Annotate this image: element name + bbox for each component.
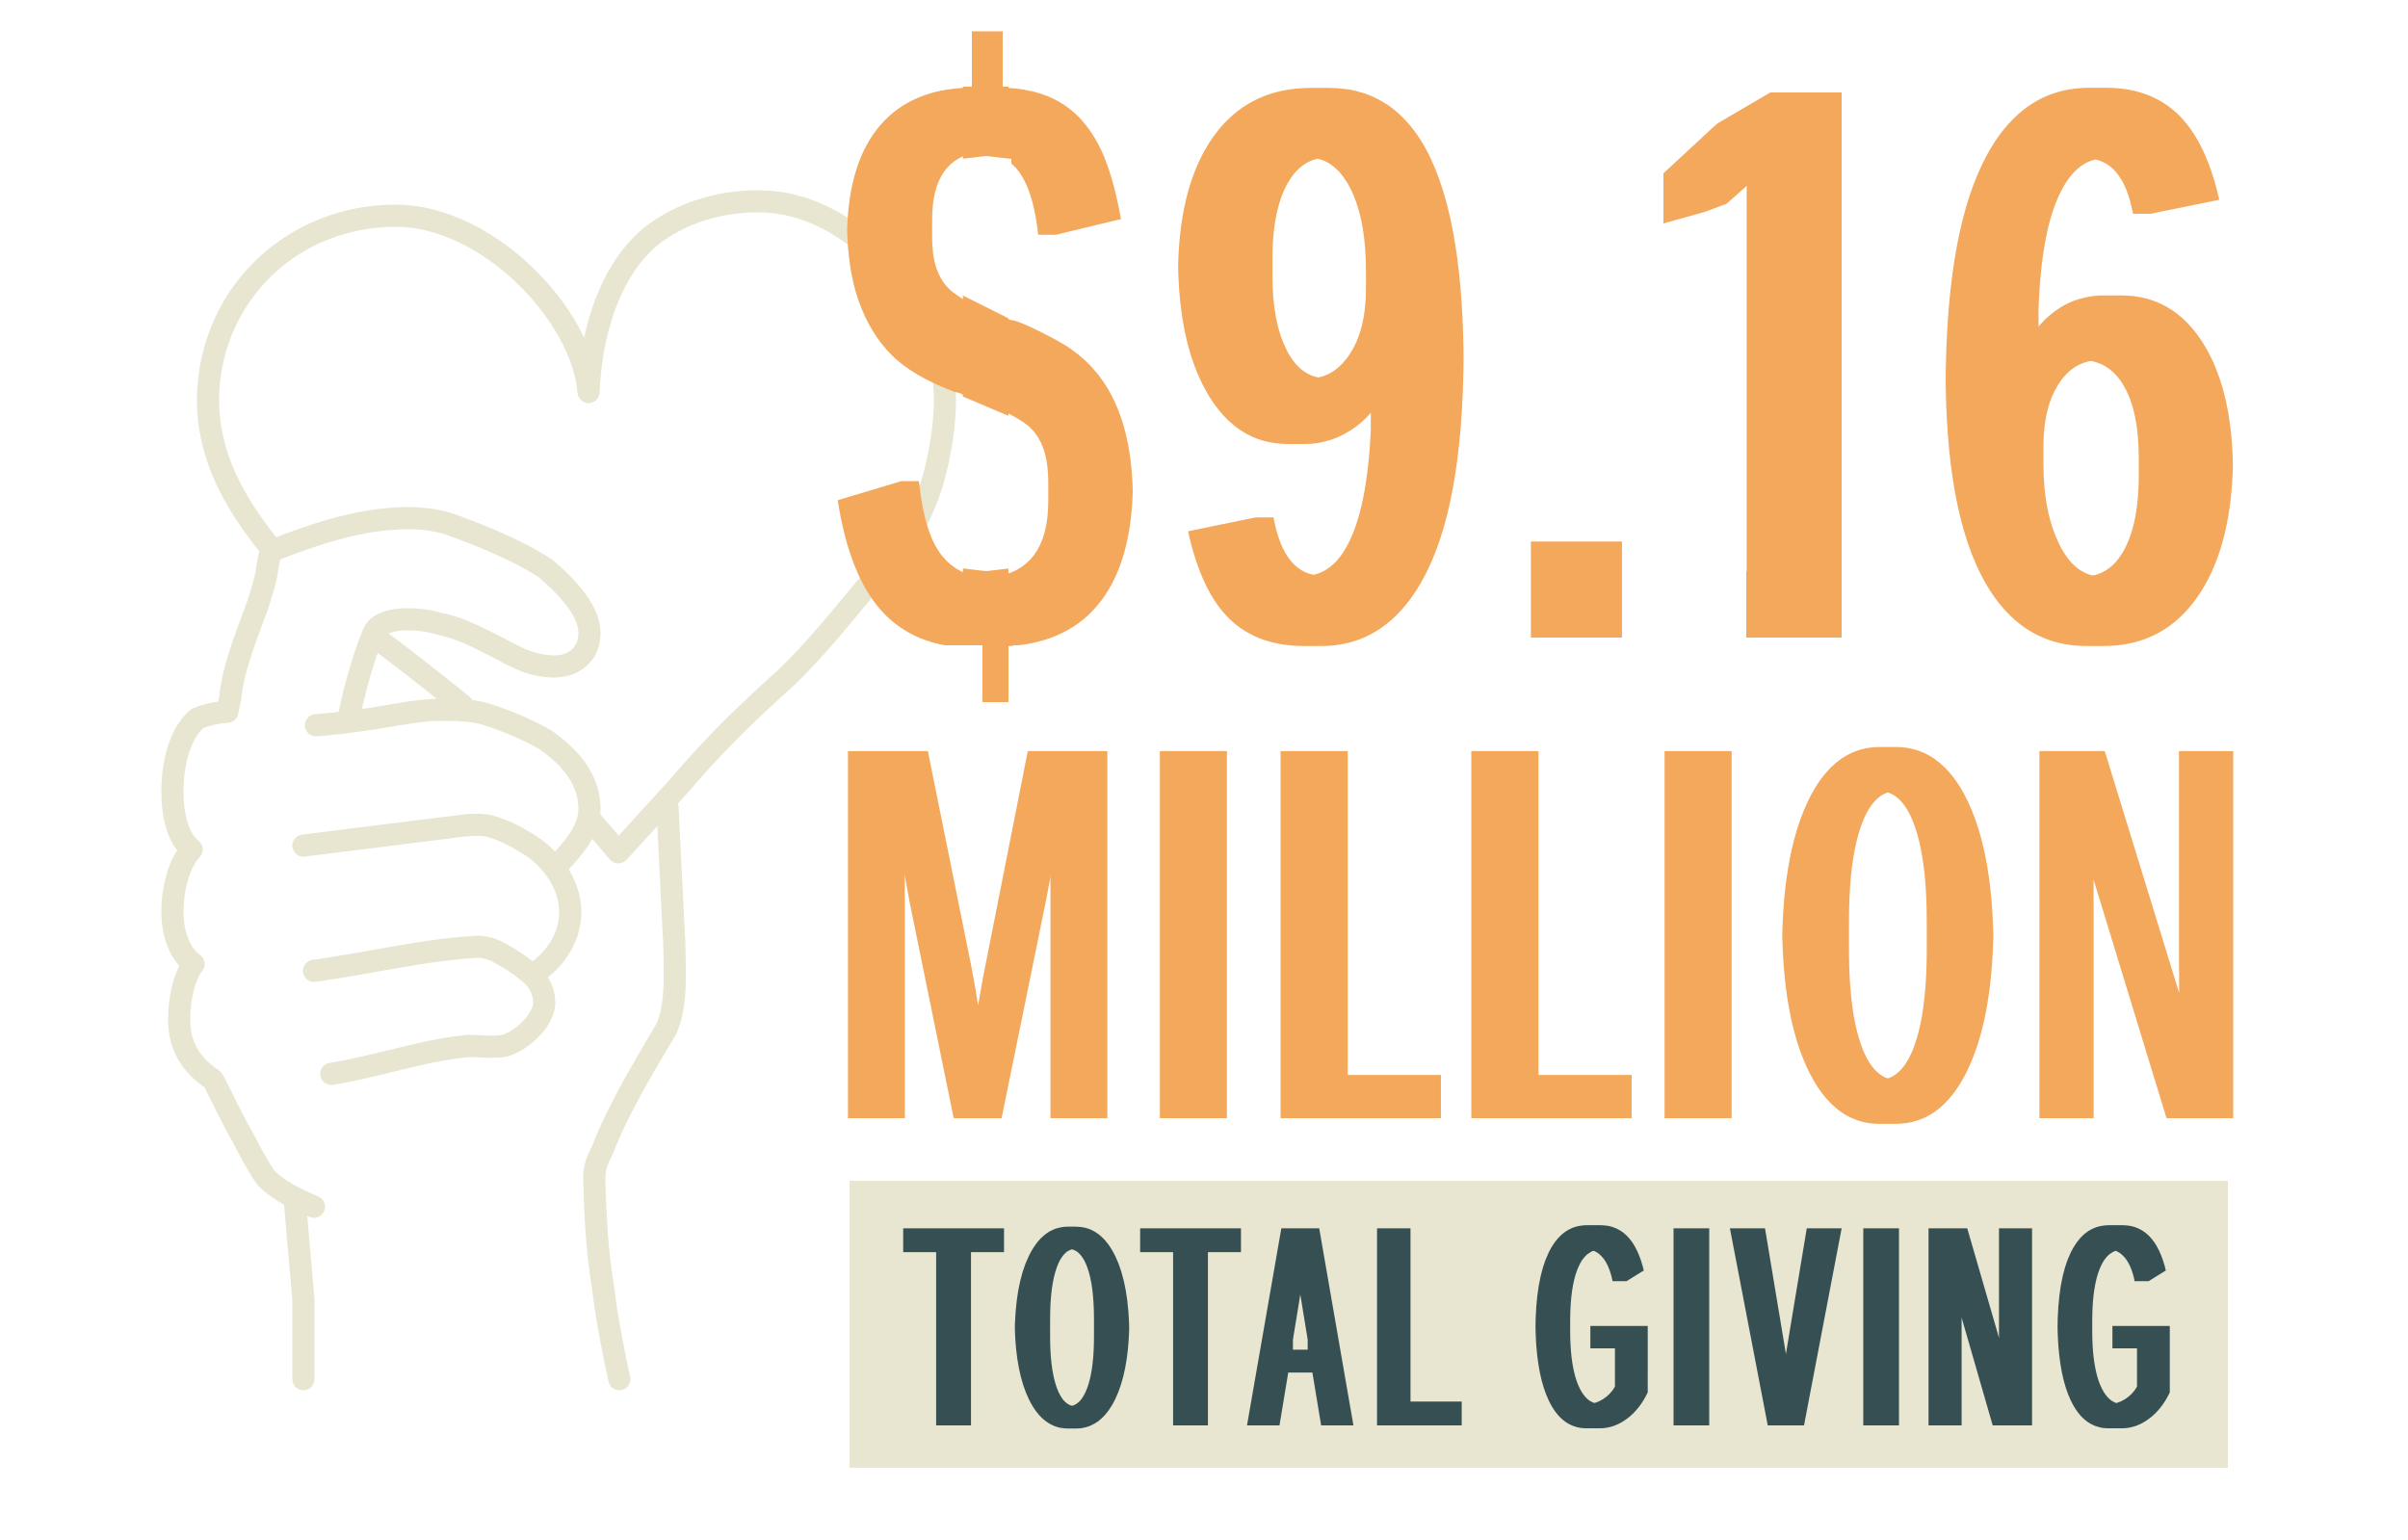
straight letters and G: I xyxy=(1670,1159,1713,1495)
letters L: L xyxy=(1279,619,1433,1247)
letter O: O xyxy=(1777,635,1999,1258)
wrist right xyxy=(594,807,675,1379)
letter N: N xyxy=(2027,621,2246,1247)
straight letters and G: I xyxy=(1860,1159,1902,1495)
digits nine and six xyxy=(1167,0,2244,820)
decimal point: . xyxy=(1487,53,1666,774)
letters L: L xyxy=(1470,619,1624,1247)
headline unit: MILLION xyxy=(830,619,2246,1258)
thumb crease xyxy=(380,640,462,705)
straight letters and G: N xyxy=(1925,1160,2035,1495)
icon: hand holding a heart xyxy=(172,201,945,1379)
letters I: I xyxy=(1644,619,1752,1247)
label text xyxy=(908,1159,2172,1501)
straight letters and G: V xyxy=(1734,1159,1838,1495)
back of hand and knuckles xyxy=(172,551,314,1207)
straight letters and G: G xyxy=(2058,1160,2172,1495)
ring finger xyxy=(314,947,544,1074)
letter M: M xyxy=(830,621,1125,1247)
wrist left xyxy=(295,1200,303,1379)
straight letters and G: T xyxy=(1145,1159,1236,1495)
panel background xyxy=(850,1181,2228,1468)
thumb xyxy=(272,518,589,718)
straight letters and G: A xyxy=(1248,1159,1352,1494)
straight letters and G xyxy=(908,1159,2172,1495)
round letter O: O xyxy=(1011,1164,1133,1501)
letters L xyxy=(1279,619,1624,1247)
straight letters and G: G xyxy=(1536,1160,1650,1495)
middle finger xyxy=(303,824,570,973)
letters I xyxy=(1139,619,1752,1247)
straight letters and G: L xyxy=(1374,1160,1459,1495)
letters I: I xyxy=(1139,619,1247,1247)
straight letters and G: T xyxy=(908,1159,999,1495)
label panel: total giving xyxy=(850,1159,2228,1501)
index finger xyxy=(316,710,589,863)
heart outline xyxy=(208,201,945,852)
headline amount: $9.16 xyxy=(837,0,2244,848)
